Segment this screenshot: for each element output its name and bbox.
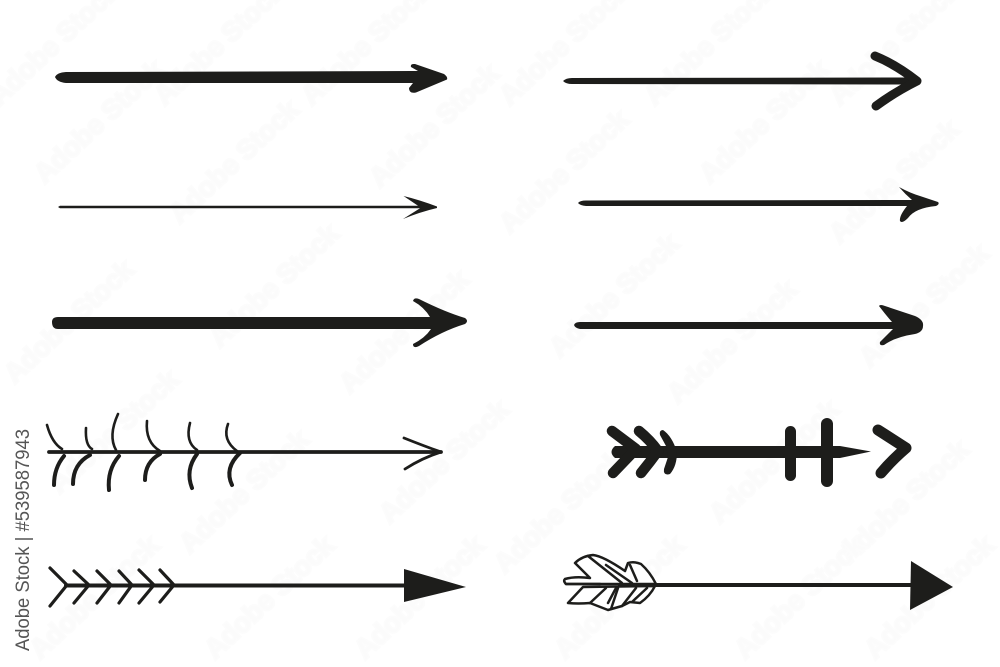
watermark pattern: Adobe Stock	[163, 94, 305, 229]
arrow: left row 2, thin line	[58, 196, 437, 219]
watermark pattern: Adobe Stock	[703, 394, 845, 529]
fletching	[612, 431, 658, 473]
bands	[785, 426, 796, 481]
watermark pattern: Adobe Stock	[729, 529, 870, 664]
arrow: right row 4, tribal arrow with bands	[612, 418, 906, 487]
watermark pattern: Adobe Stock	[363, 58, 505, 193]
watermark pattern: Adobe Stock	[488, 444, 630, 579]
arrow: right row 1, open rounded head	[563, 56, 921, 106]
watermark pattern: Adobe Stock	[173, 424, 315, 559]
arrow: left row 5, chevron fletching and solid triangle head	[50, 568, 466, 606]
watermark pattern: Adobe Stock	[493, 104, 635, 239]
arrow: right row 3, blunt solid head	[574, 305, 923, 345]
watermark pattern: Adobe Stock	[349, 529, 490, 664]
watermark pattern: Adobe Stock	[199, 529, 340, 664]
arrow: left row 4, curved feather barbs	[47, 414, 441, 490]
watermark pattern: Adobe Stock	[833, 434, 975, 569]
watermark pattern: Adobe Stock	[661, 274, 803, 409]
lower barbs	[54, 453, 240, 490]
arrow: left row 3, thick shaft with swept head	[52, 298, 467, 347]
open head	[878, 430, 906, 473]
arrow: right row 2, tapered swept head	[578, 187, 939, 222]
watermark pattern: Adobe Stock	[543, 228, 685, 363]
watermark pattern: Adobe Stock	[693, 54, 835, 189]
vertical stock id text: Adobe Stock | #539587943	[13, 429, 34, 651]
watermark pattern: Adobe Stock	[373, 394, 515, 529]
upper barbs	[47, 414, 237, 451]
watermark pattern: Adobe Stock	[823, 114, 965, 249]
shaft	[612, 446, 871, 458]
watermark pattern: Adobe Stock	[0, 254, 140, 389]
feather outline	[564, 555, 656, 610]
arrow: right row 5, outlined feather and solid triangle head	[564, 555, 953, 610]
watermark pattern: Adobe Stock	[333, 264, 475, 399]
watermark pattern: Adobe Stock	[859, 529, 1000, 664]
watermark pattern: Adobe Stock	[24, 529, 165, 664]
watermark pattern: Adobe Stock	[43, 364, 185, 499]
watermark pattern: Adobe Stock	[549, 529, 690, 664]
watermark pattern: Adobe Stock	[203, 218, 345, 353]
watermark pattern: Adobe Stock	[853, 238, 995, 373]
watermark pattern: Adobe Stock	[28, 54, 170, 189]
arrow: left row 1, bold shaft with solid head	[55, 64, 447, 93]
